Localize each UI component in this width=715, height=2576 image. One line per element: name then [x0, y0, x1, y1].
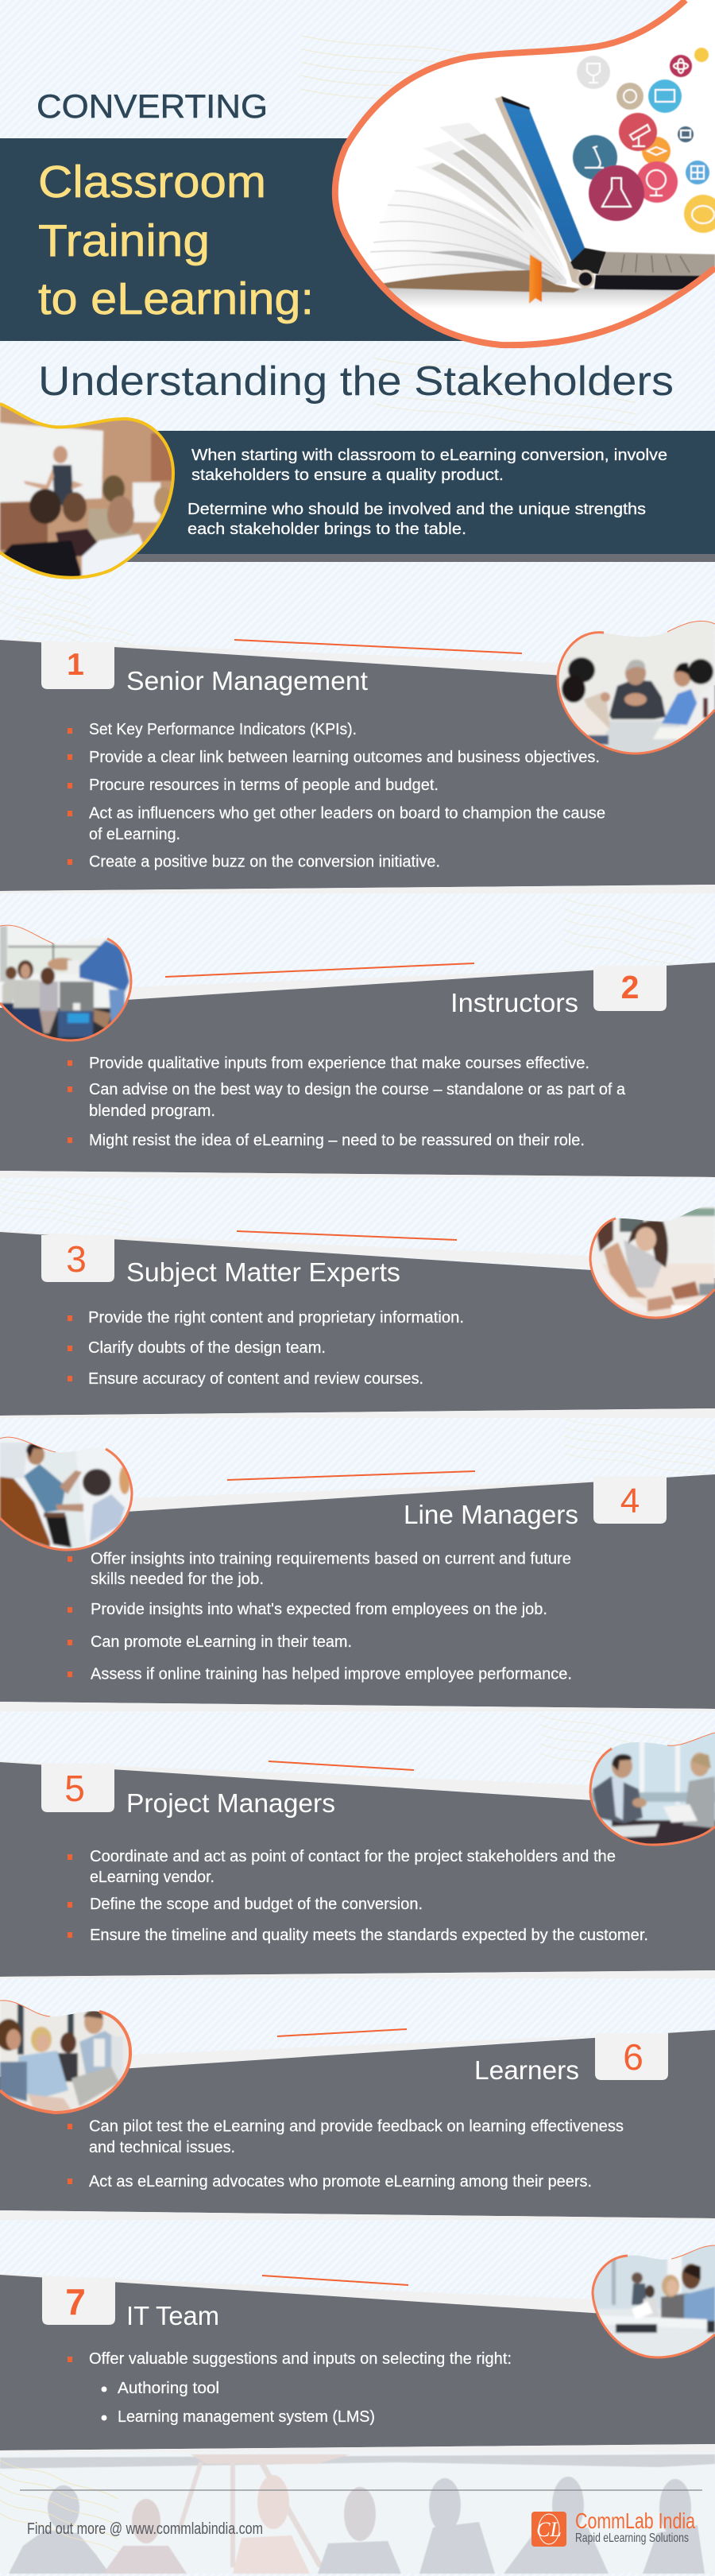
photo: manager at whiteboard [0, 1431, 139, 1554]
bullet list: Provide a clear link between learning outcomes and business objectives. [89, 749, 600, 766]
number badge [41, 642, 114, 689]
accent line [262, 2276, 408, 2285]
hero band [0, 138, 493, 341]
number badge [41, 1764, 114, 1812]
accent line [237, 1231, 457, 1240]
hero title: classroom training to eLearning [38, 157, 314, 324]
bullet list: Assess if online training has helped improve employee performance. [91, 1666, 572, 1683]
number badge: 5 [64, 1768, 85, 1809]
bullet list: Define the scope and budget of the conversion. [90, 1896, 423, 1913]
section 5: project managers [0, 1729, 715, 1978]
number badge: 2 [621, 969, 639, 1005]
bullet list: Ensure accuracy of content and review courses. [88, 1370, 423, 1388]
accent line [269, 1761, 414, 1770]
bullet list: Clarify doubts of the design team. [88, 1339, 326, 1357]
bullet list: Create a positive buzz on the conversion initiative. [89, 854, 440, 871]
photo: two managers talking [584, 1729, 715, 1848]
photo: woman writing [584, 1200, 715, 1323]
bullet list [68, 721, 605, 871]
bullet list: Might resist the idea of eLearning – need to be reassured on their role. [89, 1132, 585, 1149]
accent line [277, 2029, 407, 2036]
bullet list: Offer valuable suggestions and inputs on selecting the right: [89, 2350, 512, 2368]
bullet list: eLearning vendor. [90, 1869, 214, 1886]
footer: silhouette background [0, 2452, 715, 2574]
heading: Project Managers [126, 1788, 335, 1818]
intro text: Determine who should be involved and the unique strengths [187, 501, 646, 518]
number badge [593, 966, 667, 1011]
bullet list: skills needed for the job. [91, 1571, 264, 1588]
hero title: converting: CONVERTING [37, 87, 268, 125]
laptop [495, 96, 586, 288]
book pages [439, 122, 566, 274]
logo: CommLab India: CL [536, 2518, 562, 2541]
bullet list [68, 1848, 648, 1944]
logo: CommLab India [531, 2508, 695, 2547]
bullet list [68, 1309, 464, 1388]
hero title: classroom training to eLearning: Classroom [38, 157, 266, 207]
bullet list: Act as eLearning advocates who promote eLearning among their peers. [89, 2173, 592, 2191]
number badge [593, 1476, 667, 1524]
intro text: When starting with classroom to eLearning conversion, involve [191, 447, 667, 464]
accent line [234, 640, 522, 653]
bullet list [68, 2117, 624, 2191]
bullet list [68, 1550, 572, 1683]
book cover [376, 270, 580, 292]
bullet list: Can promote eLearning in their team. [91, 1633, 352, 1651]
photo: learners at a computer [0, 1995, 135, 2118]
bullet list: Learning management system (LMS) [118, 2408, 375, 2426]
heading: Senior Management [126, 666, 368, 695]
number badge: 4 [620, 1482, 640, 1520]
bullet list: and technical issues. [89, 2139, 235, 2156]
bullet list: Offer insights into training requirements based on current and future [91, 1550, 571, 1567]
photo: IT team at a table [588, 2241, 715, 2361]
hero title: classroom training to eLearning: Training [38, 215, 210, 266]
bullet list: Can pilot test the eLearning and provide feedback on learning effectiveness [89, 2117, 624, 2135]
ribbon [529, 254, 542, 304]
intro text: each stakeholder brings to the table. [187, 521, 466, 538]
section 2: instructors [0, 918, 715, 1178]
bullet list: Can advise on the best way to design the course – standalone or as part of a [89, 1081, 626, 1098]
number badge: 7 [65, 2281, 86, 2322]
bullet list [68, 1055, 626, 1149]
floating icons [573, 48, 715, 233]
number badge [595, 2033, 668, 2080]
number badge [41, 1235, 114, 1282]
bullet list: Provide the right content and proprietary information. [88, 1309, 464, 1327]
bullet list: Coordinate and act as point of contact for the project stakeholders and the [90, 1848, 616, 1865]
accent line [165, 963, 474, 977]
accent line [227, 1471, 475, 1480]
heading: Subject Matter Experts [126, 1257, 400, 1287]
hero illustration: book and laptop with icons [335, 0, 715, 345]
bullet list [68, 2350, 512, 2426]
footer rule [20, 2489, 702, 2491]
bullet list: Ensure the timeline and quality meets the standards expected by the customer. [90, 1927, 648, 1944]
photo: instructor with audience [0, 918, 135, 1045]
intro text: stakeholders to ensure a quality product. [191, 467, 504, 484]
footer link text: Find out more @ www.commlabindia.com [27, 2520, 263, 2538]
section 7: IT team [0, 2241, 715, 2452]
bullet list: Procure resources in terms of people and budget. [89, 777, 439, 794]
bullet list: Provide qualitative inputs from experience that make courses effective. [89, 1055, 589, 1072]
intro photo: classroom presenter [0, 397, 179, 584]
bullet list: Set Key Performance Indicators (KPIs). [89, 721, 357, 738]
number badge: 6 [623, 2036, 644, 2078]
section 6: learners [0, 1995, 715, 2220]
photo: executive meeting [548, 612, 715, 759]
bullet list: blended program. [89, 1102, 215, 1120]
hero title: understanding the stakeholders: Understanding the Stakeholders [38, 358, 674, 405]
heading: Learners [474, 2055, 579, 2085]
bullet list: Act as influencers who get other leaders on board to champion the cause [89, 804, 605, 822]
number badge: 3 [66, 1238, 87, 1280]
number badge [42, 2277, 115, 2325]
book shadow [388, 288, 681, 305]
heading: IT Team [126, 2301, 219, 2330]
section 1: senior management [0, 612, 715, 893]
intro panel [119, 431, 715, 562]
bullet list: Authoring tool [118, 2380, 219, 2397]
hero title: classroom training to eLearning: to eLearning: [38, 273, 314, 324]
bullet list: Provide insights into what's expected from employees on the job. [91, 1601, 547, 1618]
number badge: 1 [67, 648, 84, 682]
bullet list: of eLearning. [89, 826, 180, 843]
intro text [187, 447, 667, 538]
decorative wave lines [0, 36, 715, 1781]
heading: Instructors [450, 988, 578, 1017]
section 3: subject matter experts [0, 1200, 715, 1418]
section 4: line managers [0, 1431, 715, 1711]
heading: Line Managers [404, 1500, 578, 1529]
